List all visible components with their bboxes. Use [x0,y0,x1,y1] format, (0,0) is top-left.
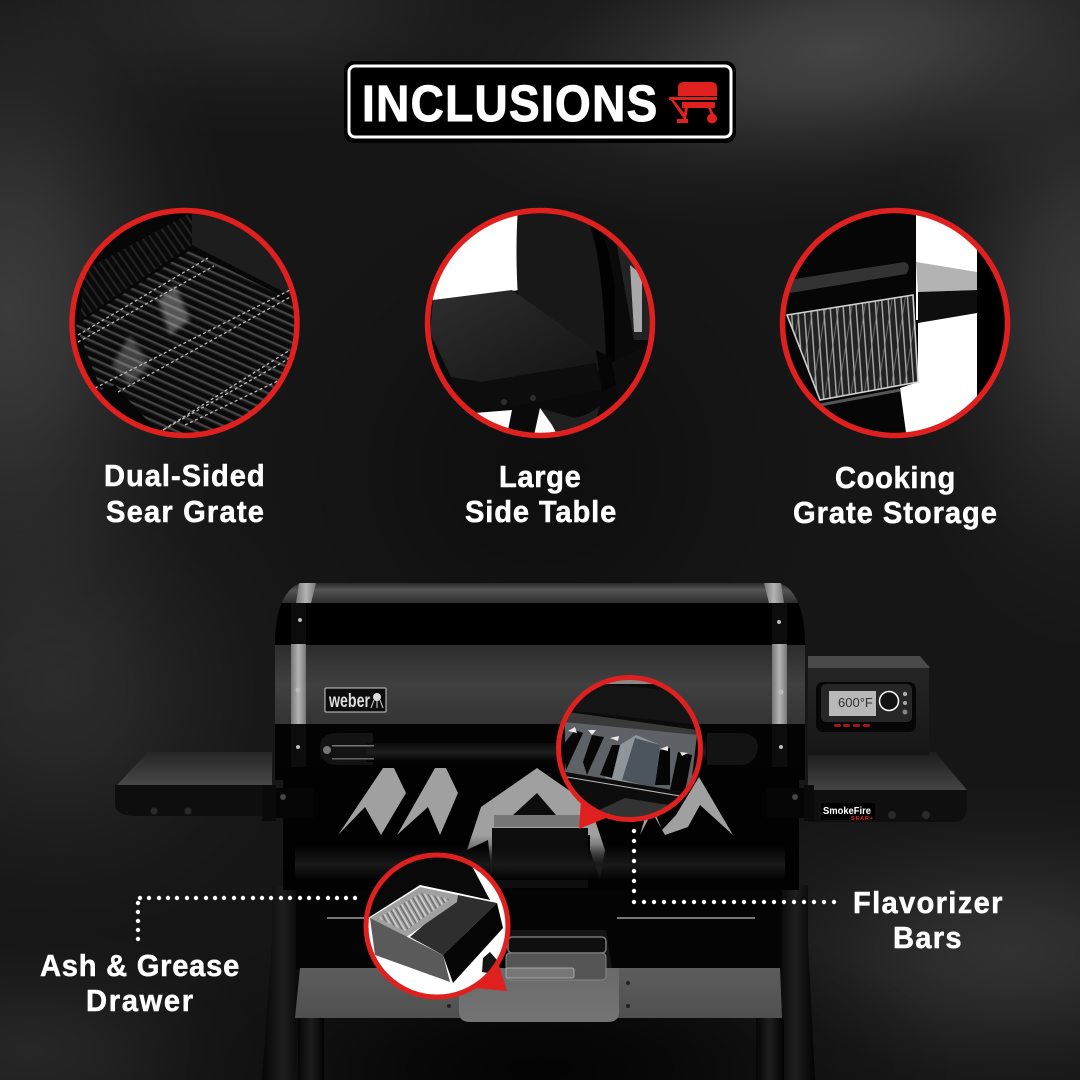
label: large side table: Side Table [465,495,616,529]
lower shelf panel [295,885,782,1022]
label: flavorizer bars: Flavorizer [853,886,1003,920]
label: cooking grate storage: Cooking [835,461,955,495]
callout line: ash and grease drawer [136,896,357,941]
control box [808,656,930,755]
callout: flavorizer bars zoom [556,675,704,829]
handle bar [320,733,758,765]
label: ash and grease drawer: Ash & Grease [40,949,239,983]
icon: red grill [669,82,717,124]
panel: dual-sided sear grate photo [70,208,300,440]
flavorizer bar ghosts [338,768,733,880]
label: dual-sided sear grate [104,459,265,529]
ghost drip tray [459,930,619,1022]
control knob [880,692,898,710]
grill lid and body [275,583,805,893]
label: flavorizer bars: Bars [893,921,962,955]
label: flavorizer bars [853,886,1003,955]
label: dual-sided sear grate: Sear Grate [106,495,264,529]
label: large side table: Large [499,460,581,494]
title badge [344,61,736,143]
SmokeFire badge: SEAR+ [851,816,873,822]
SmokeFire badge [821,803,875,822]
panel: cooking grate storage photo [780,208,1010,440]
title text: INCLUSIONS [362,76,657,133]
temperature display: 600°F [838,695,873,710]
hinge brackets [262,785,814,821]
label: cooking grate storage [793,461,997,530]
panel: large side table photo [425,208,655,440]
label: cooking grate storage: Grate Storage [793,496,997,530]
label: ash and grease drawer [40,949,239,1018]
grill product illustration [115,583,967,1080]
left side table [115,752,272,816]
weber logo badge: weber [328,691,370,712]
label: ash and grease drawer: Drawer [86,984,193,1018]
callout line: flavorizer bars [632,829,836,904]
SmokeFire badge: SmokeFire [823,806,871,817]
label: large side table [465,460,616,529]
callout: ash and grease drawer zoom [364,853,510,999]
label: dual-sided sear grate: Dual-Sided [104,459,265,493]
chrome bands [291,583,787,767]
right side table [808,752,967,822]
grill legs [262,885,815,1080]
